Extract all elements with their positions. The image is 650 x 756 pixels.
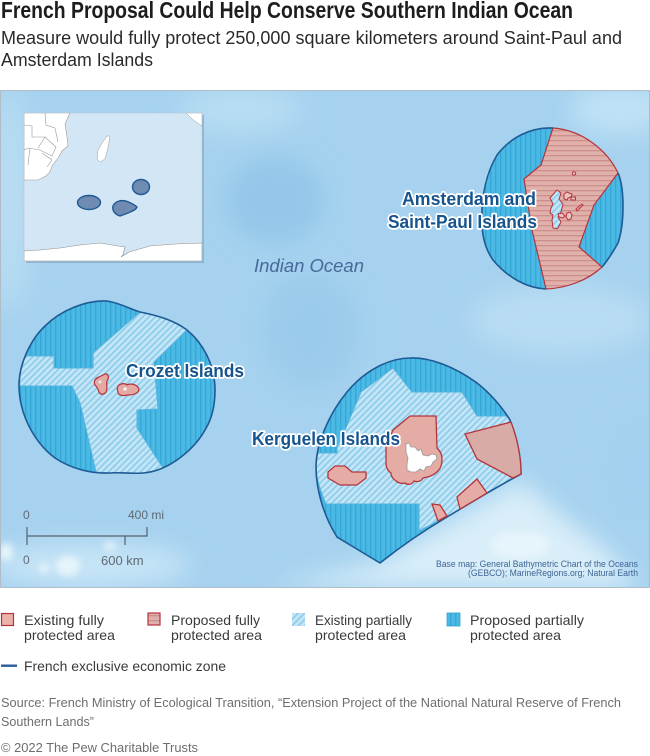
scale bar: 400 mi <box>128 508 164 522</box>
subtitle <box>1 27 622 70</box>
existing fully protected islands <box>94 374 139 396</box>
EEZ outline <box>19 301 215 473</box>
main island <box>406 443 437 472</box>
Madagascar <box>97 136 110 162</box>
legend: French EEZ: French exclusive economic zone <box>24 658 226 674</box>
legend: proposed fully protected <box>148 612 262 643</box>
legend: proposed partially protected: Proposed partially <box>470 612 584 628</box>
legend: proposed partially protected <box>447 612 584 643</box>
existing partially protected area <box>20 312 187 473</box>
subtitle: Amsterdam Islands <box>1 49 153 70</box>
map credit <box>436 560 638 578</box>
Africa <box>24 113 70 180</box>
source note <box>1 696 621 729</box>
EEZ outline <box>482 128 623 289</box>
legend: existing fully protected: Existing fully <box>24 612 104 628</box>
scale bar <box>23 508 164 568</box>
source note: Source: French Ministry of Ecological Transition, “Extension Project of the National Natural Reserve of French <box>1 696 621 710</box>
map panel <box>0 85 650 587</box>
Antarctica <box>24 243 202 261</box>
Australia corner <box>186 113 202 126</box>
map credit: (GEBCO); MarineRegions.org; Natural Earth <box>468 568 638 579</box>
zone: Amsterdam and Saint-Paul Islands <box>482 128 623 289</box>
legend <box>1 612 584 674</box>
legend: proposed fully protected: Proposed fully <box>171 612 260 628</box>
inset EEZ: Kerguelen <box>113 201 137 216</box>
inset EEZ: Amsterdam <box>132 180 150 194</box>
legend: proposed partially protected: protected area <box>470 627 561 643</box>
island labels: Kerguelen Islands <box>252 428 400 449</box>
legend: existing fully protected: protected area <box>24 627 115 643</box>
scale bar: 0 <box>23 553 30 567</box>
proposed partially protected waters <box>482 128 623 289</box>
island labels <box>126 188 537 449</box>
existing partially protected area around islands <box>550 190 563 229</box>
inset locator map <box>24 113 204 263</box>
zone: Crozet Islands <box>19 301 215 473</box>
island labels: Crozet Islands <box>126 360 244 381</box>
proposed partially protected waters <box>316 358 521 563</box>
small existing protected islets <box>558 172 583 220</box>
legend: proposed fully protected: protected area <box>171 627 262 643</box>
scale bar: 600 km <box>101 553 144 568</box>
label: Indian Ocean: Indian Ocean <box>254 256 364 276</box>
legend: existing fully protected <box>2 612 115 643</box>
island labels: Amsterdam and <box>402 188 536 209</box>
legend: existing partially protected: protected area <box>315 627 406 643</box>
island labels: Saint-Paul Islands <box>388 211 537 232</box>
source note: Southern Lands” <box>1 715 94 729</box>
scale bar: 0 <box>23 508 30 522</box>
ocean background <box>0 85 650 587</box>
existing partially protected area <box>316 368 521 531</box>
proposed partially protected waters <box>19 301 215 473</box>
EEZ outline <box>316 358 521 563</box>
legend: existing partially protected <box>292 612 412 643</box>
inset EEZ: Crozet <box>78 196 100 210</box>
subtitle: Measure would fully protect 250,000 square kilometers around Saint-Paul and <box>1 27 622 48</box>
legend: existing partially protected: Existing partially <box>315 612 412 628</box>
copyright: © 2022 The Pew Charitable Trusts <box>1 741 198 755</box>
map frame <box>0 90 650 588</box>
proposed fully protected area <box>524 128 618 289</box>
zone: Kerguelen Islands <box>316 358 521 563</box>
existing fully protected areas <box>328 416 521 521</box>
